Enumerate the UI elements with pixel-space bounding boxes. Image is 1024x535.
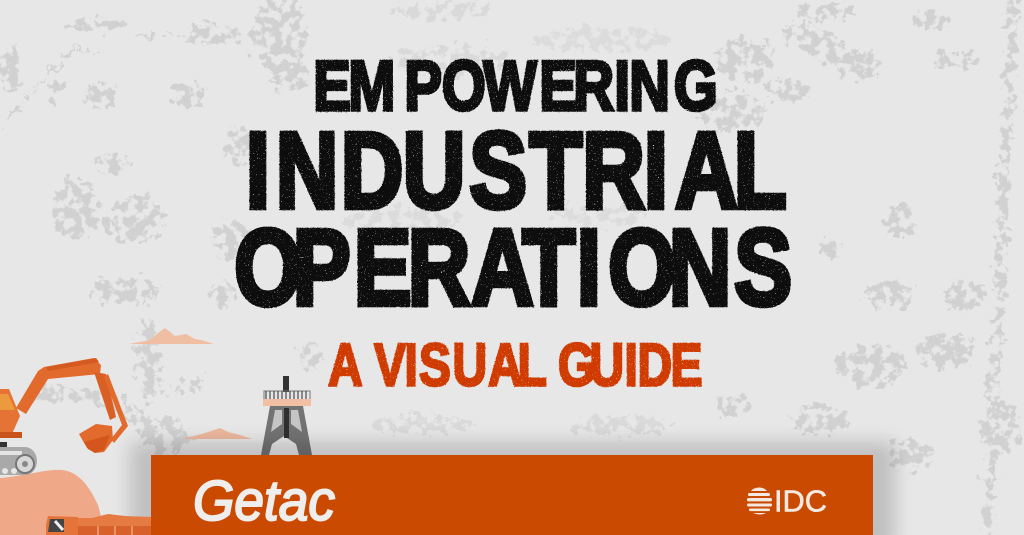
excavator cab bbox=[0, 389, 20, 434]
excavator bucket bbox=[79, 424, 113, 453]
icon: excavator bbox=[0, 358, 128, 475]
icon: cloud upper left bbox=[129, 328, 214, 344]
IDC globe mark bbox=[747, 488, 772, 514]
excavator boom and arm bbox=[16, 358, 101, 414]
excavator tracks bbox=[0, 442, 7, 447]
icon: cloud lower bbox=[182, 428, 252, 439]
banner: orange logo bar bbox=[151, 455, 873, 535]
title line 3: OPERATIONS bbox=[234, 206, 792, 327]
logo: Getac: Getac bbox=[193, 469, 335, 533]
IDC wordmark: IDC bbox=[774, 484, 827, 518]
bar drop shadow bbox=[130, 442, 895, 535]
icon: dirt mound bbox=[0, 470, 106, 535]
title line 2: INDUSTRIAL bbox=[246, 109, 787, 231]
title line 1: EMPOWERING bbox=[313, 46, 718, 126]
logo: IDC bbox=[747, 484, 827, 518]
icon: dump truck bbox=[46, 514, 152, 535]
icon: oil derrick tower bbox=[261, 376, 312, 455]
title: Empowering Industrial Operations bbox=[234, 46, 792, 327]
subtitle: A Visual Guide: A VISUAL GUIDE bbox=[328, 332, 703, 399]
